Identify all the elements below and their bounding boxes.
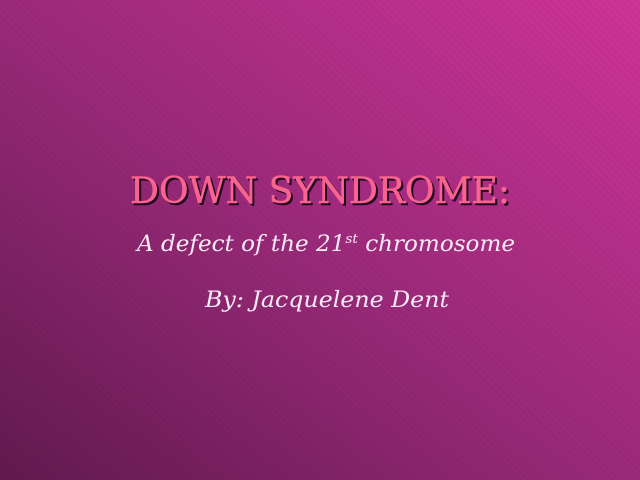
- subtitle: chromosome: [358, 232, 515, 257]
- title: DOWN SYNDROME:: [130, 171, 510, 212]
- title: DOWN SYNDROME:: [132, 173, 512, 214]
- author line: By: Jacquelene Dent: [204, 288, 449, 313]
- subtitle: st: [345, 232, 359, 247]
- subtitle: A defect of the 21: [137, 232, 336, 257]
